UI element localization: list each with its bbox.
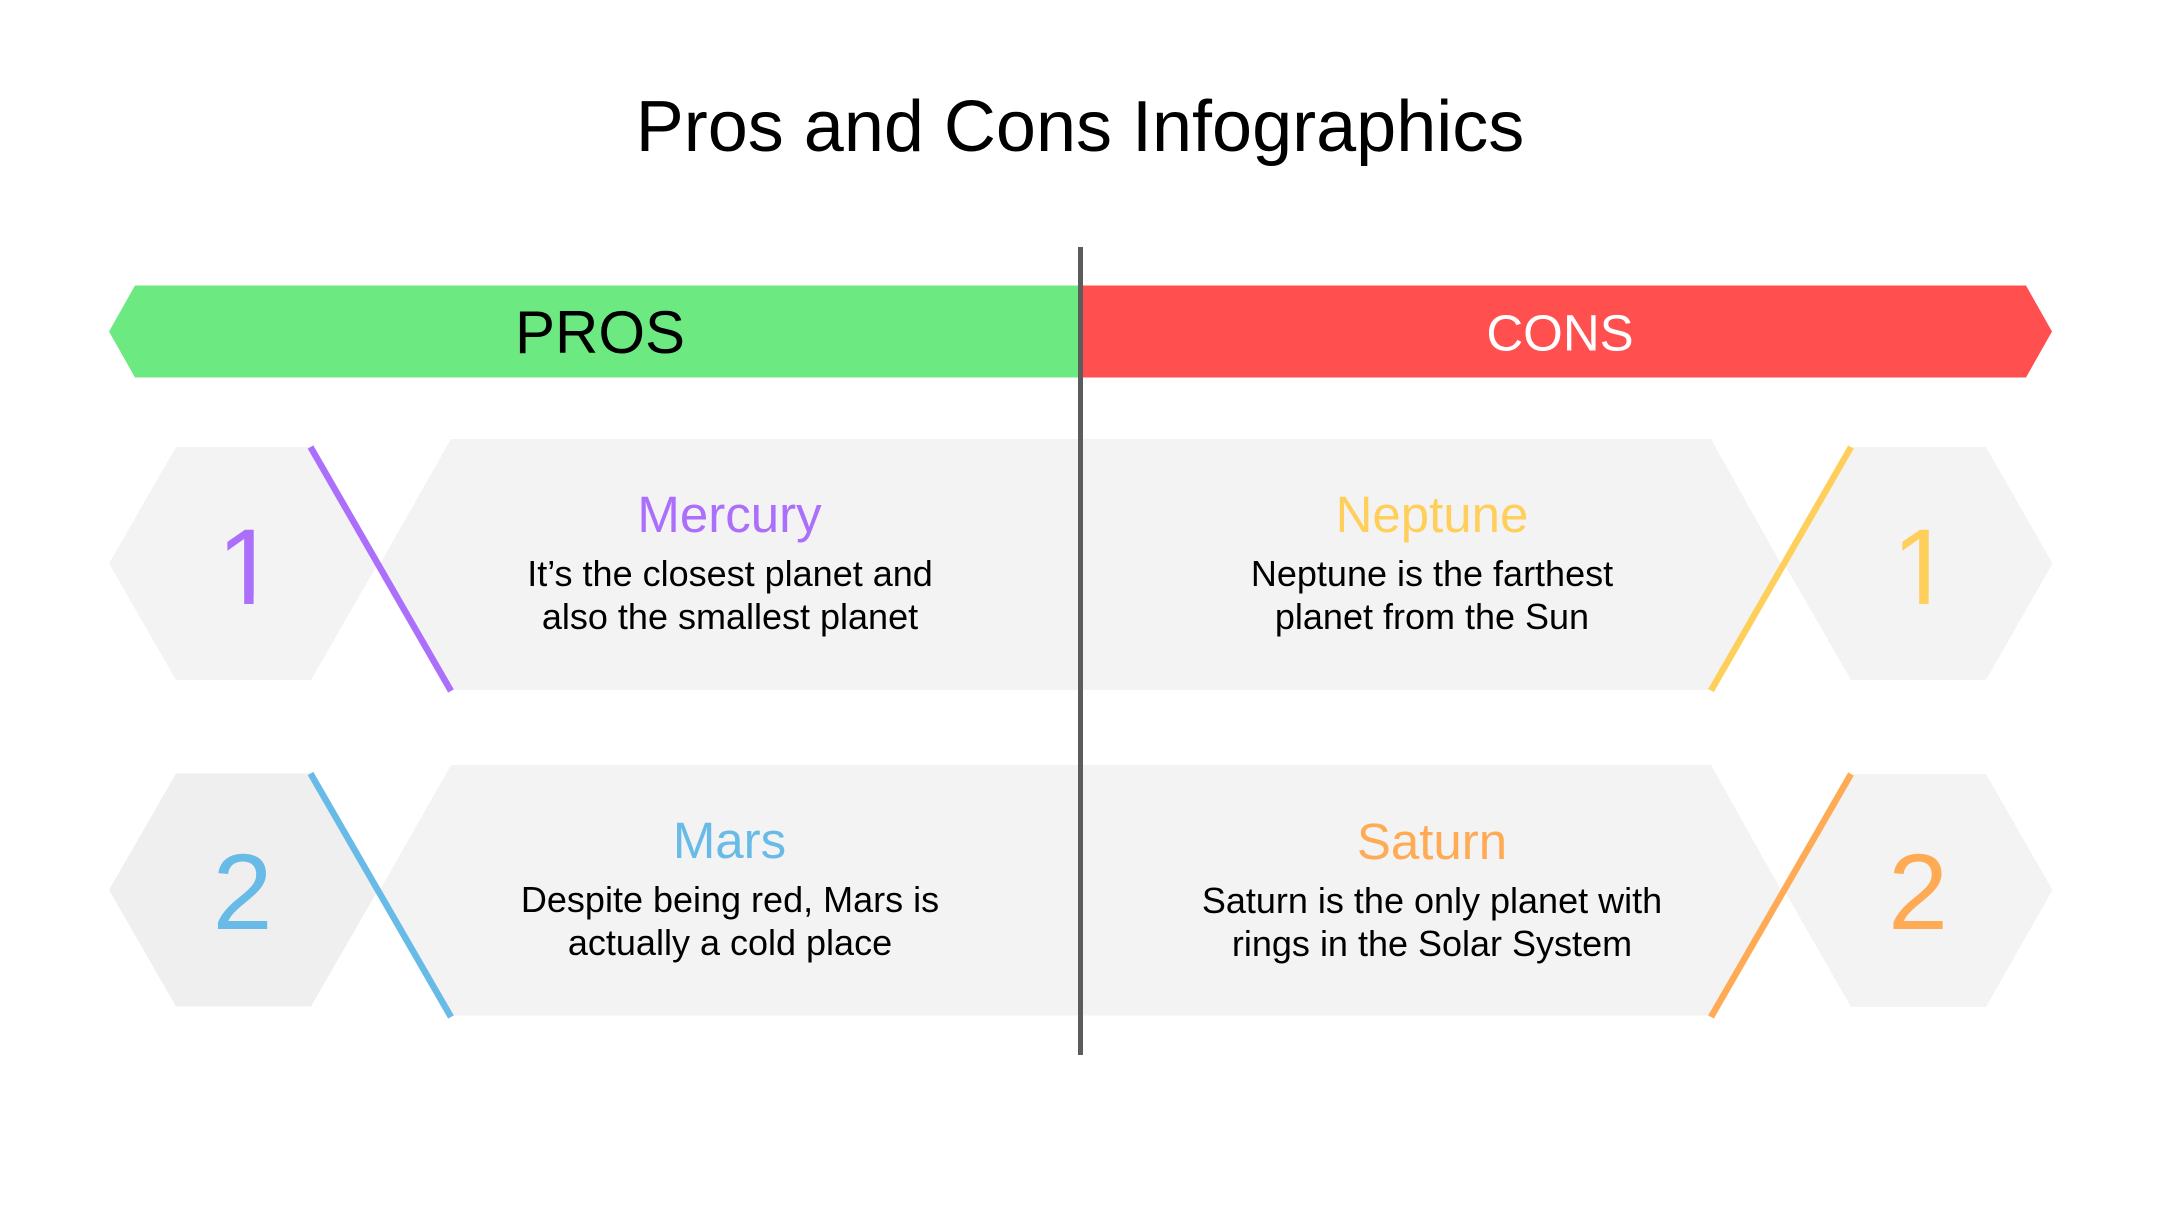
panel: pro 2 Mars: [109, 765, 1080, 1017]
hexagon badge 1: [109, 447, 378, 680]
heading: Neptune: [1336, 486, 1528, 543]
panel: con 1 Neptune: [1080, 439, 2052, 690]
panel: pro 1 Mercury: also the smallest planet: [542, 596, 918, 637]
center divider line: [1078, 247, 1083, 1055]
banner: pros: PROS: [515, 299, 685, 366]
banner: cons: CONS: [1486, 304, 1634, 362]
number: 2: [1888, 831, 1948, 952]
text card: [1080, 765, 1781, 1016]
panel: pro 2 Mars: actually a cold place: [568, 922, 892, 963]
number: 2: [212, 831, 273, 952]
hexagon badge 2: [109, 774, 378, 1006]
number: 1: [1892, 506, 1952, 627]
description: Despite being red, Mars is: [521, 879, 939, 920]
description: Saturn is the only planet with: [1202, 880, 1662, 921]
panel: con 1 Neptune: planet from the Sun: [1275, 596, 1589, 637]
description: It’s the closest planet and: [527, 553, 933, 594]
heading: Mercury: [637, 486, 822, 543]
heading: Mars: [673, 812, 786, 869]
hexagon badge 2: [1784, 774, 2052, 1007]
heading: Saturn: [1357, 813, 1507, 870]
description: Neptune is the farthest: [1251, 553, 1613, 594]
banner: pros: [109, 286, 1080, 378]
text card: [1080, 439, 1781, 690]
number: 1: [217, 506, 277, 627]
divider slash: [310, 447, 451, 691]
hexagon badge 1: [1784, 447, 2052, 680]
panel: con 2 Saturn: [1080, 765, 2052, 1017]
panel: pro 1 Mercury: [109, 439, 1080, 691]
divider slash: [310, 774, 451, 1017]
text card: [380, 765, 1080, 1016]
title: Pros and Cons Infographics: [636, 87, 1524, 167]
panel: con 2 Saturn: rings in the Solar System: [1232, 923, 1632, 964]
divider slash: [1711, 447, 1851, 690]
divider slash: [1711, 774, 1851, 1017]
text card: [380, 439, 1080, 690]
banner: cons: [1080, 286, 2052, 378]
